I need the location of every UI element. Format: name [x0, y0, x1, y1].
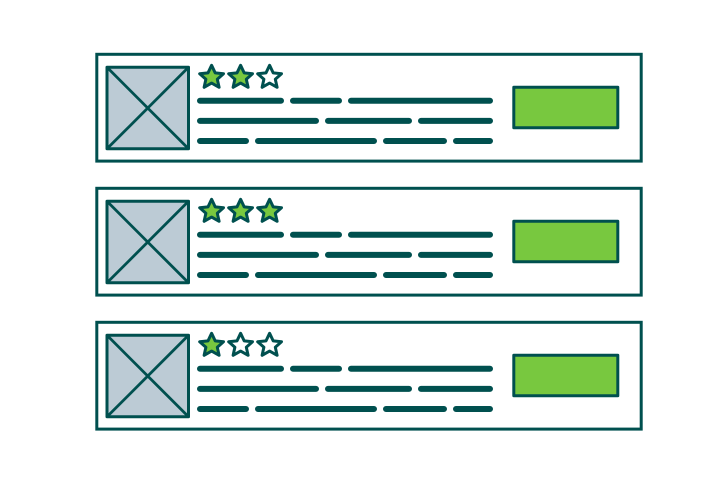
card 2 image placeholder	[107, 201, 188, 283]
card 1 image placeholder	[107, 67, 188, 149]
panel: card 3, one star	[97, 322, 641, 429]
card 2 button	[514, 221, 618, 262]
panel: card 1, three stars	[97, 54, 641, 161]
panel: card 2, three stars	[97, 188, 641, 295]
card 3 text lines	[200, 369, 490, 409]
card 2 star rating	[200, 199, 282, 221]
card 3 star rating	[200, 333, 282, 355]
card 1 star rating	[200, 65, 282, 87]
card 2 frame	[97, 188, 641, 295]
card 2 text lines	[200, 235, 490, 275]
card 3 image placeholder	[107, 335, 188, 417]
card 3 button	[514, 355, 618, 396]
card 1 button	[514, 87, 618, 128]
card 1 text lines	[200, 101, 490, 141]
card 1 frame	[97, 54, 641, 161]
card 3 frame	[97, 322, 641, 429]
